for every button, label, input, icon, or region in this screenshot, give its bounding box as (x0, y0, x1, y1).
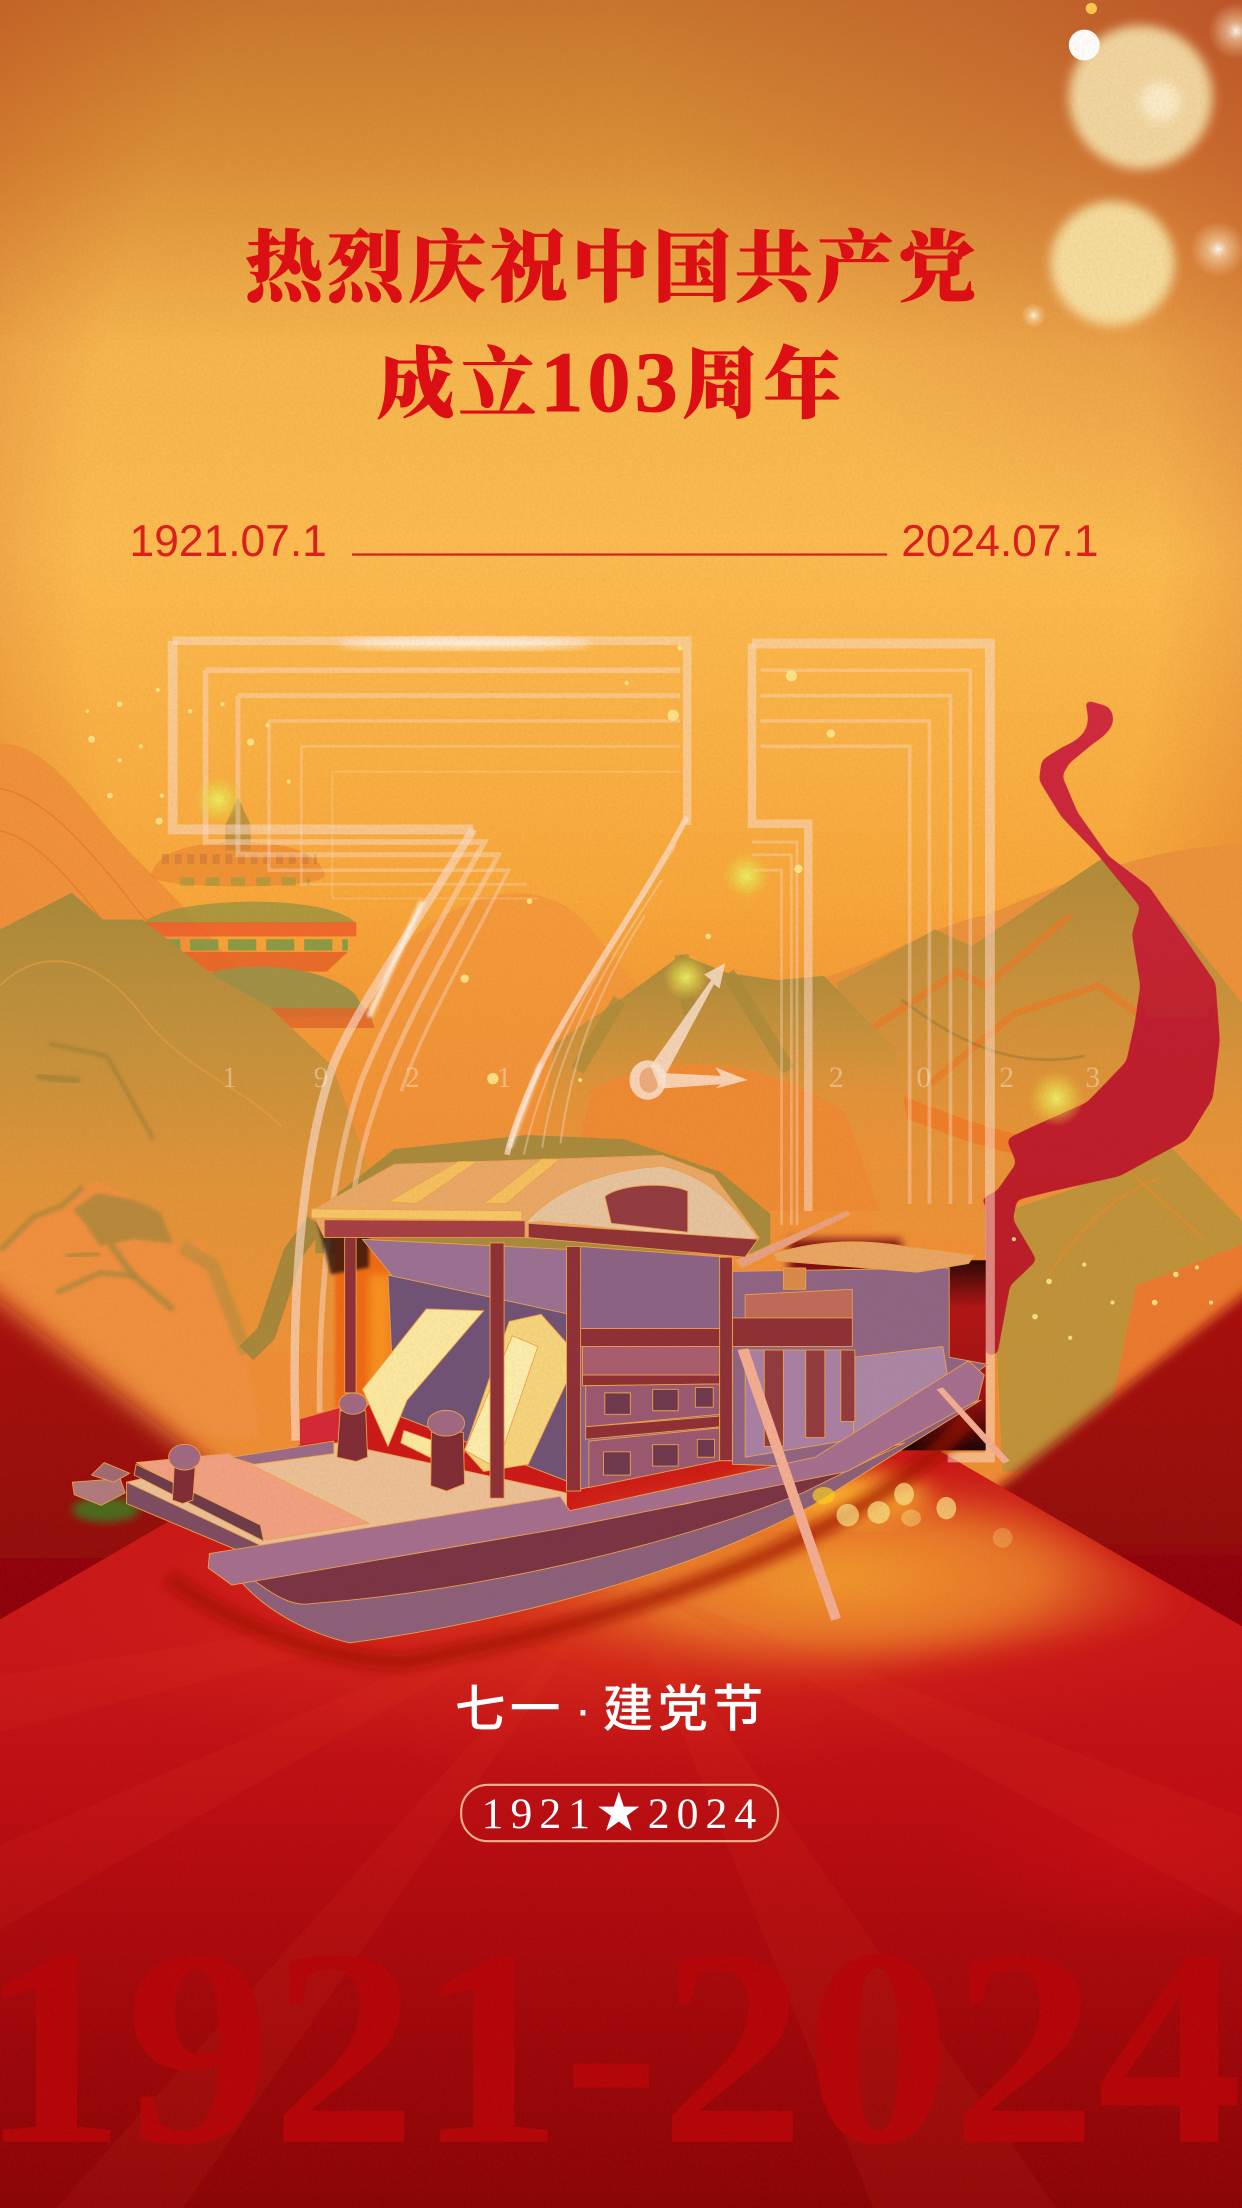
icon: clock hands (629, 963, 748, 1100)
digit 7 (173, 638, 687, 1441)
floor: red stage (0, 1262, 1242, 2208)
bokeh lights top right (1021, 3, 1242, 328)
numeral 71 outline (173, 638, 990, 1457)
date start: 1921.07.1 (130, 517, 327, 566)
boat bollards (169, 1393, 465, 1504)
boat posts (345, 1238, 732, 1498)
timeline line (352, 553, 887, 556)
right dark wedge (986, 1265, 1242, 1831)
ribbon (897, 700, 1219, 1355)
year pill: 1921★2024 (482, 1790, 763, 1838)
floor light rays (57, 2024, 1056, 2208)
clock face: year digits: 1 (222, 1062, 237, 1094)
boat main cabin wall (362, 1239, 726, 1489)
boat yellow doors (362, 1309, 567, 1471)
boat oars (737, 1348, 1010, 1621)
subtitle: 七一 (455, 1680, 565, 1737)
clock face: year digits: 3 (1085, 1062, 1100, 1094)
clock face: year digits: 2 (829, 1062, 844, 1094)
title line 1: 热烈庆祝中国共产党 (245, 225, 980, 311)
boat oar pieces (736, 1211, 850, 1268)
front right mountains (997, 1146, 1242, 1472)
icon: temple of heaven (142, 797, 375, 1028)
front left mountains (0, 893, 770, 1436)
watermark: year range: 1921-2024 (0, 1891, 1242, 2203)
clock face: year digits: 1 (497, 1062, 512, 1094)
illustration: red boat (72, 1155, 1010, 1643)
bokeh lights near boat (813, 1483, 1012, 1548)
left dark wedge (0, 1267, 239, 1831)
boat deck (72, 1441, 567, 1552)
back mountains (0, 744, 1242, 1633)
title line 2: 成立103周年 (377, 334, 845, 430)
floor glow under boat (0, 1464, 1242, 2208)
subtitle: 建党节 (603, 1680, 767, 1737)
boat rail (208, 1361, 984, 1585)
sparkles and glow points (86, 645, 1213, 1340)
clock face: year digits: 2 (405, 1062, 420, 1094)
behind-boat dark glow (72, 1219, 986, 1662)
clock face: year digits: 0 (916, 1062, 931, 1094)
boat roof (311, 1155, 759, 1257)
boat hull (229, 1400, 981, 1643)
clock face: year digits (222, 1062, 1100, 1094)
digit 1 (752, 644, 990, 1457)
subtitle: · (575, 1680, 596, 1737)
clock face: year digits: 9 (314, 1062, 328, 1094)
clock face: year digits: 2 (999, 1062, 1014, 1094)
boat rear cabin (732, 1242, 987, 1468)
date end: 2024.07.1 (901, 517, 1099, 566)
